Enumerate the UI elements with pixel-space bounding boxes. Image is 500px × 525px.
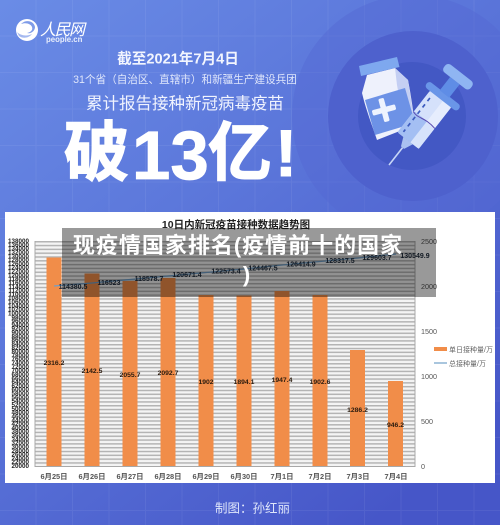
x axis labels: 7月3日 <box>346 472 370 481</box>
left axis labels: 138000 <box>8 238 29 245</box>
left axis labels: 46000 <box>11 413 29 420</box>
bar data labels: 1902.6 <box>310 379 331 386</box>
left axis labels: 56000 <box>11 394 29 401</box>
left axis labels: 102000 <box>8 307 29 314</box>
right axis labels: 2000 <box>421 282 437 291</box>
left axis labels: 128000 <box>8 257 29 264</box>
line data labels: 116523 <box>98 280 121 287</box>
line data labels: 124467.5 <box>248 266 278 272</box>
left axis labels: 112000 <box>8 288 29 295</box>
left axis labels: 96000 <box>11 318 29 325</box>
logo: people.cn <box>16 19 87 44</box>
left axis labels: 124000 <box>8 265 29 272</box>
left axis labels: 66000 <box>11 375 29 382</box>
bar data labels: 2142.5 <box>82 368 103 375</box>
panel: chart <box>5 212 495 483</box>
bar data labels: 2092.7 <box>158 370 179 377</box>
line data labels: 114380.5 <box>59 284 88 291</box>
left axis labels: 30000 <box>11 444 29 451</box>
left axis labels: 106000 <box>8 299 29 306</box>
left axis labels: 86000 <box>11 337 29 344</box>
left axis labels: 58000 <box>11 391 29 398</box>
left axis labels: 24000 <box>11 455 29 462</box>
line data labels: 128317.5 <box>325 258 355 265</box>
heading: date: 截至2021年7月4日 <box>117 50 239 68</box>
left axis labels: 90000 <box>11 330 29 337</box>
bar data labels: 946.2 <box>387 422 404 429</box>
left axis labels: 108000 <box>8 295 29 302</box>
headline: over 1.3 billion: 破 <box>64 116 129 189</box>
left axis labels: 70000 <box>11 368 29 375</box>
legend <box>434 345 493 368</box>
left axis labels: 80000 <box>11 349 29 356</box>
left axis labels: 22000 <box>11 459 29 466</box>
left axis labels: 72000 <box>11 364 29 371</box>
left axis labels: 78000 <box>11 352 29 359</box>
left axis labels: 64000 <box>11 379 29 386</box>
left axis labels: 88000 <box>11 333 29 340</box>
x axis labels: 6月30日 <box>230 472 258 481</box>
bar data labels <box>44 360 404 429</box>
left axis labels: 132000 <box>8 249 29 256</box>
right axis labels: 1500 <box>421 327 437 336</box>
left axis labels: 98000 <box>11 314 29 321</box>
overlay title <box>73 233 403 287</box>
icon: vaccine vial and syringe <box>359 57 477 178</box>
left axis labels: 104000 <box>8 303 29 310</box>
left axis labels: 28000 <box>11 448 29 455</box>
overlay title: 现疫情国家排名(疫情前十的国家 <box>73 233 403 258</box>
line: total doses <box>54 254 396 286</box>
left axis labels: 48000 <box>11 410 29 417</box>
bar data labels: 2316.2 <box>44 360 65 367</box>
left axis labels: 32000 <box>11 440 29 447</box>
left axis labels: 82000 <box>11 345 29 352</box>
headline: over 1.3 billion <box>64 116 297 194</box>
left axis labels: 94000 <box>11 322 29 329</box>
heading: scope: 31个省（自治区、直辖市）和新疆生产建设兵团 <box>73 73 297 86</box>
x axis labels: 6月27日 <box>116 472 144 481</box>
chart title: 10日内新冠疫苗接种数据趋势图 <box>162 218 310 231</box>
left axis labels: 118000 <box>8 276 29 283</box>
bar data labels: 1902 <box>198 379 214 386</box>
left axis labels: 52000 <box>11 402 29 409</box>
right axis labels: 0 <box>421 462 425 471</box>
line data labels <box>59 253 430 291</box>
left axis labels: 136000 <box>8 242 29 249</box>
line data labels: 118578.7 <box>135 276 164 283</box>
left axis labels: 68000 <box>11 371 29 378</box>
left axis labels: 84000 <box>11 341 29 348</box>
x axis labels: 6月29日 <box>192 472 220 481</box>
left axis labels: 54000 <box>11 398 29 405</box>
left axis labels: 92000 <box>11 326 29 333</box>
headline: over 1.3 billion: 13 <box>132 117 209 194</box>
bar data labels: 2055.7 <box>120 372 141 379</box>
bar data labels: 1286.2 <box>347 407 368 414</box>
overlay title: ) <box>243 262 251 287</box>
left axis labels: 74000 <box>11 360 29 367</box>
left axis labels: 26000 <box>11 452 29 459</box>
headline: over 1.3 billion: ! <box>275 116 297 190</box>
left axis labels: 34000 <box>11 436 29 443</box>
x axis labels: 6月28日 <box>154 472 182 481</box>
left axis labels: 36000 <box>11 433 29 440</box>
x axis labels: 6月26日 <box>78 472 106 481</box>
x axis labels <box>40 472 408 481</box>
left axis labels: 122000 <box>8 269 29 276</box>
legend: 总接种量/万 <box>449 359 486 368</box>
legend: 单日接种量/万 <box>449 345 493 354</box>
x axis labels: 7月2日 <box>308 472 332 481</box>
bar data labels: 1894.1 <box>234 379 255 386</box>
heading: cumulative vaccinations: 累计报告接种新冠病毒疫苗 <box>86 94 284 113</box>
left axis labels: 110000 <box>8 291 29 298</box>
left axis labels: 44000 <box>11 417 29 424</box>
left axis labels: 114000 <box>8 284 29 291</box>
left axis labels: 38000 <box>11 429 29 436</box>
left axis labels <box>8 238 29 470</box>
title overlay banner <box>62 228 436 297</box>
line data labels: 122573.4 <box>211 268 241 276</box>
plot grid <box>35 241 415 467</box>
left axis labels: 76000 <box>11 356 29 363</box>
logo: people.cn: 人民网 <box>40 21 87 39</box>
line data labels: 130549.9 <box>400 253 430 260</box>
left axis labels: 134000 <box>8 246 29 253</box>
left axis labels: 120000 <box>8 272 29 279</box>
headline: over 1.3 billion: 亿 <box>208 117 272 189</box>
left axis labels: 100000 <box>8 310 29 317</box>
left axis labels: 116000 <box>8 280 29 287</box>
right axis labels: 2500 <box>421 237 437 246</box>
icon: vial <box>359 57 415 140</box>
left axis labels: 62000 <box>11 383 29 390</box>
icon: syringe <box>373 60 477 178</box>
line data labels: 120671.4 <box>172 272 202 279</box>
credit: 制图：孙红丽 <box>215 500 290 516</box>
x axis labels: 7月4日 <box>384 472 408 481</box>
right axis labels: 500 <box>421 417 433 426</box>
left axis labels: 130000 <box>8 253 29 260</box>
left axis labels: 40000 <box>11 425 29 432</box>
left axis labels: 42000 <box>11 421 29 428</box>
decorative concentric circles <box>292 0 500 237</box>
logo: people.cn: people.cn <box>46 35 83 44</box>
right axis labels <box>421 237 437 471</box>
left axis labels: 60000 <box>11 387 29 394</box>
left axis labels: 20000 <box>11 463 29 470</box>
x axis labels: 7月1日 <box>270 472 294 481</box>
right axis labels: 1000 <box>421 372 437 381</box>
x axis labels: 6月25日 <box>40 472 68 481</box>
line data labels: 126414.9 <box>286 262 316 268</box>
left axis labels: 126000 <box>8 261 29 268</box>
line data labels: 129603.7 <box>362 255 392 262</box>
bar data labels: 1947.4 <box>272 377 293 384</box>
bar chart: daily doses <box>46 258 403 466</box>
left axis labels: 50000 <box>11 406 29 413</box>
